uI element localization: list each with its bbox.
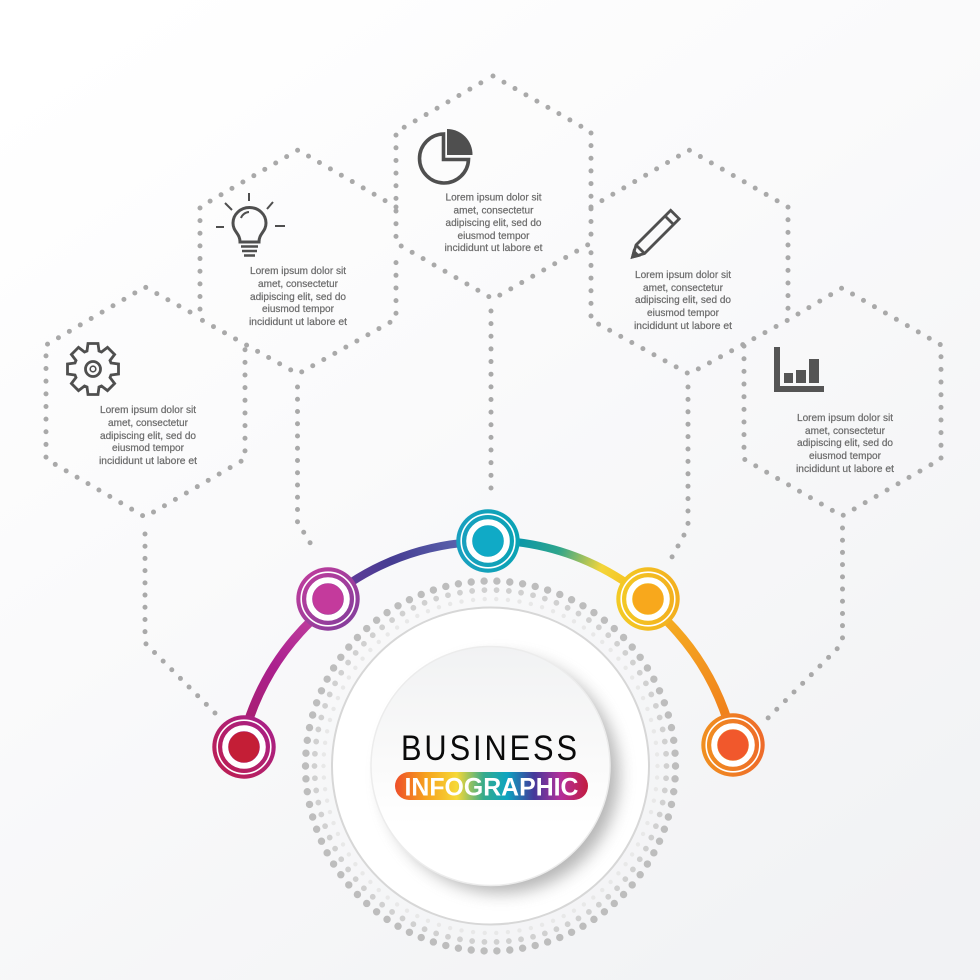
text block 1: Lorem ipsum dolor sit xyxy=(100,405,196,416)
connector: step 5 xyxy=(768,528,842,718)
text block 2: amet, consectetur xyxy=(258,279,339,290)
arc: yellow to orange xyxy=(666,620,728,722)
text block 5: incididunt ut labore et xyxy=(796,464,894,475)
text block 1: incididunt ut labore et xyxy=(99,456,197,467)
node 4 yellow xyxy=(616,567,680,631)
panel: step 2 idea xyxy=(200,150,396,374)
arc: cyan to yellow xyxy=(516,542,628,584)
text block 3: eiusmod tempor xyxy=(458,231,530,242)
icon: pencil xyxy=(628,210,679,261)
text block 4: adipiscing elit, sed do xyxy=(635,295,731,306)
halftone dot ring xyxy=(306,581,676,951)
center ring xyxy=(332,608,649,924)
panel: step 5 statistics xyxy=(744,288,941,516)
text block 1: eiusmod tempor xyxy=(112,443,185,454)
text block 4 xyxy=(634,270,732,332)
node 1 red xyxy=(212,715,276,779)
text block 5 xyxy=(796,413,894,475)
text block 2: incididunt ut labore et xyxy=(249,317,347,328)
text block 4: amet, consectetur xyxy=(643,283,724,294)
text block 5: eiusmod tempor xyxy=(809,451,882,462)
hexagon outline 1 xyxy=(46,287,245,517)
text block 2: Lorem ipsum dolor sit xyxy=(250,266,346,277)
connector: step 1 xyxy=(145,534,215,713)
hexagon outline 4 xyxy=(591,150,788,374)
icon: pie chart xyxy=(420,129,473,183)
text block 5: adipiscing elit, sed do xyxy=(797,438,893,449)
hexagon outline 5 xyxy=(744,288,941,516)
text block 1: amet, consectetur xyxy=(108,418,189,429)
text block 2: adipiscing elit, sed do xyxy=(250,292,346,303)
connector: step 4 xyxy=(672,387,688,557)
node 5 orange xyxy=(701,713,765,777)
text block 3: incididunt ut labore et xyxy=(444,243,543,254)
disc shadow xyxy=(383,657,619,893)
text block 1 xyxy=(99,405,197,467)
center disc xyxy=(371,646,619,893)
subtitle pill: INFOGRAPHIC: INFOGRAPHIC xyxy=(404,774,578,802)
text block 2: eiusmod tempor xyxy=(262,304,335,315)
disc face xyxy=(371,646,610,886)
connector: step 3 xyxy=(488,311,494,488)
icon: light bulb xyxy=(216,193,285,256)
icon: bar chart xyxy=(774,347,824,392)
hexagon outline 2 xyxy=(200,150,396,374)
icon: gear xyxy=(68,344,118,394)
connector: step 2 xyxy=(298,387,316,552)
arc: magenta to cyan xyxy=(350,543,462,583)
text block 4: Lorem ipsum dolor sit xyxy=(635,270,731,281)
text block 3: adipiscing elit, sed do xyxy=(446,218,542,229)
text block 5: Lorem ipsum dolor sit xyxy=(797,413,893,424)
text block 3 xyxy=(444,192,543,254)
text block 3: Lorem ipsum dolor sit xyxy=(446,192,542,204)
panel: step 4 writing xyxy=(591,150,788,374)
title: BUSINESS: BUSINESS xyxy=(401,728,577,767)
node 3 cyan xyxy=(456,509,520,573)
text block 3: amet, consectetur xyxy=(454,206,534,216)
text block 4: eiusmod tempor xyxy=(647,308,720,319)
node 2 magenta xyxy=(296,567,360,631)
panel: step 1 settings xyxy=(46,287,245,517)
text block 4: incididunt ut labore et xyxy=(634,321,732,332)
text block 2 xyxy=(249,266,347,328)
text block 5: amet, consectetur xyxy=(805,426,886,437)
arc: red to magenta xyxy=(248,620,312,722)
hexagon outline 3 xyxy=(396,76,591,299)
text block 1: adipiscing elit, sed do xyxy=(100,431,196,442)
panel: step 3 data xyxy=(396,76,591,299)
